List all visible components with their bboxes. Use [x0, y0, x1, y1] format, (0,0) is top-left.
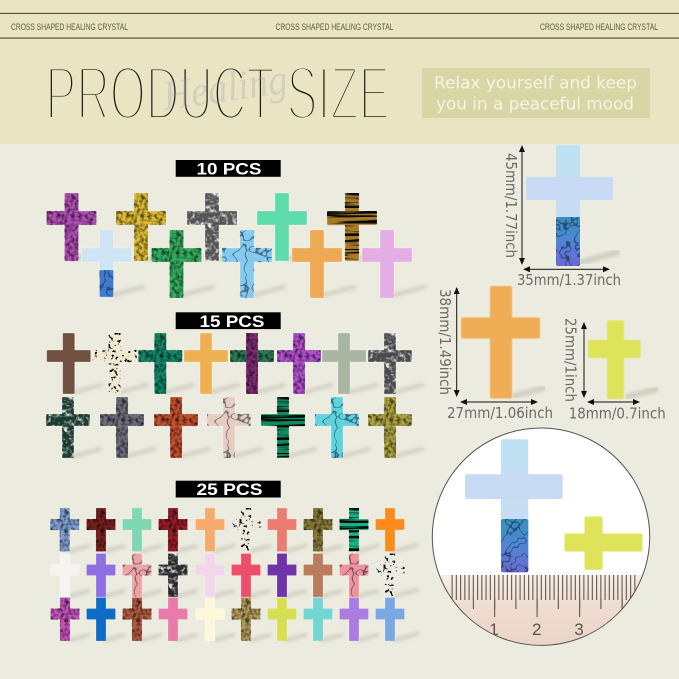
crosses: 10 pcs set — [46, 193, 412, 298]
panel: scale comparison circle — [430, 428, 652, 647]
icon: yellow cross in circle — [564, 516, 642, 570]
ruler: 2 — [532, 620, 541, 639]
orange cross shadow — [514, 388, 544, 396]
ruler: 1 — [489, 620, 499, 639]
callout — [422, 68, 650, 118]
label: 15 PCS — [176, 312, 281, 331]
arrow: 27mm width — [460, 399, 538, 405]
arrow: 38mm height — [454, 287, 460, 397]
crosses: 25 pcs row one — [50, 508, 404, 552]
icon: large blue cross — [526, 145, 613, 266]
watermark script: Healing — [159, 57, 290, 120]
header band — [0, 0, 679, 144]
crosses: 15 pcs set — [46, 333, 412, 458]
cross shadows — [70, 254, 424, 640]
arrow: 18mm width — [587, 399, 640, 405]
icon: yellow cross — [588, 320, 640, 399]
dimension: 18mm: 18mm/0.7inch — [569, 405, 666, 423]
crosses: 25 pcs row three — [50, 598, 404, 641]
label: 15 PCS: 15 PCS — [200, 313, 264, 331]
dimension: 35mm: 35mm/1.37inch — [517, 271, 621, 289]
arrow: 35mm width — [523, 266, 610, 272]
icon: blue cross in circle — [465, 439, 563, 572]
dimension: 38mm: 38mm/1.49inch — [436, 289, 454, 395]
label: 25 PCS: 25 PCS — [196, 481, 262, 499]
arrow: 45mm height — [519, 145, 525, 265]
label: 10 PCS: 10 PCS — [196, 160, 262, 178]
large blue cross shadow — [582, 252, 618, 262]
label: 25 PCS — [176, 481, 281, 499]
ruler — [440, 575, 642, 645]
title: PRODUCT SIZE — [45, 52, 390, 136]
dimension: 45mm: 45mm/1.77inch — [502, 153, 520, 258]
header strip text center: CROSS SHAPED HEALING CRYSTAL — [276, 22, 394, 32]
dimension: 27mm: 27mm/1.06inch — [447, 404, 553, 422]
ruler: 3 — [574, 620, 584, 639]
icon: orange cross — [461, 286, 540, 398]
header strip text left: CROSS SHAPED HEALING CRYSTAL — [11, 22, 128, 32]
callout: you in a peaceful mood — [436, 94, 634, 114]
label: 10 PCS — [176, 160, 281, 178]
arrow: 25mm height — [581, 322, 587, 398]
callout: Relax yourself and keep — [434, 74, 637, 92]
crosses: 25 pcs row two — [50, 554, 404, 597]
dimension: 25mm: 25mm/1inch — [562, 318, 580, 402]
yellow cross shadow — [627, 389, 657, 397]
